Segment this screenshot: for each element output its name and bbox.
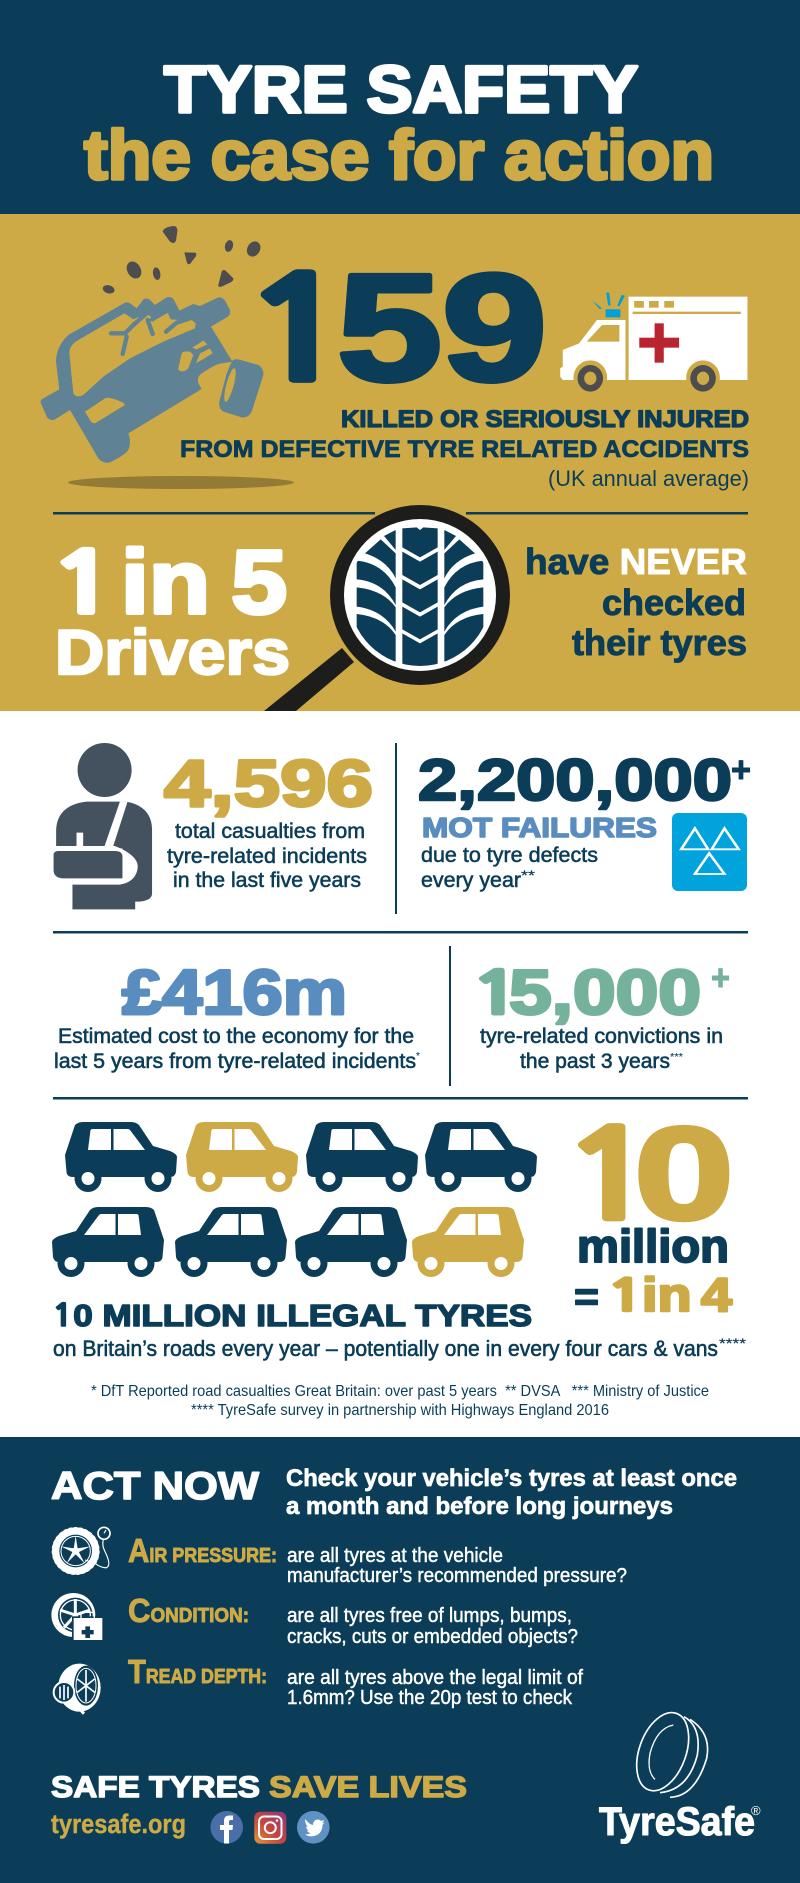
- big number 159: [239, 243, 547, 413]
- icon: MOT triangles: [672, 813, 747, 891]
- statistic: 4,596 casualties: in the last five years: [173, 869, 361, 892]
- icon: facebook: [210, 1811, 243, 1844]
- statistic: 15,000 convictions: +: [711, 957, 730, 998]
- logo wordmark: TyreSafe: [599, 1800, 755, 1844]
- statement: killed or seriously injured: [180, 406, 749, 491]
- statistic: 15,000 convictions: [470, 957, 730, 1073]
- big number 159: 1: [239, 261, 357, 402]
- text: air pressure question: are all tyres at the vehicle: [287, 1545, 503, 1567]
- icon: person with arm sling: [54, 743, 152, 909]
- icon: air pressure tyre and gauge: [53, 1527, 110, 1574]
- statistic: £416m cost: Estimated cost to the economy for the: [58, 1025, 414, 1048]
- statistic: £416m cost: last 5 years from tyre-related incidents: [54, 1050, 416, 1073]
- slogan: safe tyres save lives: [51, 1771, 467, 1804]
- icon: debris: [102, 226, 263, 295]
- statistic: 15,000 convictions: 1: [470, 964, 522, 1023]
- statistic: 1 in 5 drivers: [48, 533, 290, 688]
- statistic: 10 million = 1 in 4: 1: [606, 1274, 645, 1318]
- icon: ambulance: [560, 293, 747, 395]
- text: condition question: cracks, cuts or embedded objects?: [287, 1626, 578, 1648]
- heading: 10 million illegal tyres: 10 MILLION ILLEGAL TYRES: [52, 1298, 532, 1333]
- statistic: 4,596 casualties: 4,596: [164, 746, 373, 820]
- text: condition question: are all tyres free of lumps, bumps,: [287, 1605, 572, 1627]
- statistic: £416m cost: [54, 958, 420, 1073]
- panel: white statistics: [0, 711, 800, 1437]
- statistic: 10 million = 1 in 4: million: [577, 1220, 729, 1272]
- statistic: 2,200,000 MOT failures: 2,200,000: [418, 748, 732, 813]
- footnotes: **** TyreSafe survey in partnership with Highways England 2016: [191, 1402, 609, 1419]
- panel: gold statistics: [0, 214, 800, 711]
- statistic: 4,596 casualties: [164, 746, 373, 892]
- text: on Britain's roads: ****: [719, 1335, 747, 1351]
- text: check your tyres: a month and before long journeys: [286, 1493, 673, 1520]
- slogan: safe tyres save lives: SAFE TYRES: [51, 1771, 260, 1804]
- statement: have never checked: their tyres: [572, 622, 747, 663]
- statistic: 1 in 5 drivers: 1: [48, 542, 119, 626]
- icon: row of eight cars: [52, 1122, 537, 1277]
- statement: have never checked: [525, 541, 747, 663]
- text: tread depth question: [287, 1667, 583, 1709]
- statement: killed or seriously injured: (UK annual average): [548, 466, 749, 491]
- text: tread depth question: 1.6mm? Use the 20p test to check: [287, 1687, 573, 1709]
- statistic: 10 million = 1 in 4: in 4: [642, 1268, 732, 1321]
- panel: act now: [0, 1437, 800, 1883]
- logo: TyreSafe: ®: [751, 1803, 761, 1818]
- label: tread depth: TREAD DEPTH:: [128, 1653, 267, 1690]
- title: TYRE SAFETY: [164, 52, 638, 126]
- label: condition: CONDITION:: [128, 1592, 249, 1629]
- icon: magnifier over tyre tread: [264, 505, 510, 711]
- statistic: 2,200,000 MOT failures: due to tyre defects: [421, 844, 598, 867]
- statistic: 4,596 casualties: tyre-related incidents: [167, 845, 367, 868]
- text: tread depth question: are all tyres above the legal limit of: [287, 1667, 583, 1689]
- statement: killed or seriously injured: KILLED OR SERIOUSLY INJURED: [341, 406, 749, 433]
- big number 159: 59: [337, 243, 547, 413]
- panel: header: [0, 0, 800, 214]
- statistic: £416m cost: £416m: [122, 958, 347, 1028]
- slogan: safe tyres save lives: SAVE LIVES: [269, 1771, 467, 1804]
- statement: have never checked: checked: [602, 582, 746, 623]
- text: condition question: [287, 1605, 578, 1648]
- footnotes: * DfT Reported road casualties Great Britain: over past 5 years ** DVSA *** Ministry of Justice: [91, 1383, 709, 1400]
- icon: tread depth tyre and magnifier: [54, 1664, 101, 1714]
- statistic: 1 in 5 drivers: Drivers: [55, 618, 290, 688]
- statistic: 2,200,000 MOT failures: [418, 748, 751, 892]
- statement: killed or seriously injured: FROM DEFECTIVE TYRE RELATED ACCIDENTS: [180, 436, 749, 463]
- heading: act now: ACT NOW: [51, 1465, 259, 1508]
- footnotes: [91, 1383, 709, 1419]
- statistic: 10 million = 1 in 4: 1: [559, 1116, 661, 1238]
- icon: condition wheel and first aid box: [51, 1593, 104, 1641]
- subtitle: the case for action: [84, 116, 714, 194]
- statistic: 10 million = 1 in 4: =: [574, 1275, 599, 1319]
- statistic: 10 million = 1 in 4: [559, 1100, 734, 1321]
- icon: crashed car: [41, 226, 263, 463]
- text: check your tyres: Check your vehicle’s tyres at least once: [286, 1465, 737, 1492]
- text: air pressure question: [287, 1545, 627, 1587]
- statement: have never checked: have NEVER: [525, 541, 747, 582]
- statistic: 15,000 convictions: ***: [670, 1052, 683, 1063]
- statistic: 15,000 convictions: 5,000: [509, 958, 701, 1028]
- label: air pressure: AIR PRESSURE:: [128, 1532, 277, 1569]
- statistic: 1 in 5 drivers: in 5: [121, 533, 287, 633]
- statistic: £416m cost: *: [416, 1051, 420, 1062]
- text: check your tyres: [286, 1465, 737, 1520]
- text: on Britain's roads: on Britain’s roads every year – potentially one in every four cars & vans: [53, 1336, 718, 1361]
- icon: car shadow: [68, 476, 294, 489]
- statistic: 10 million = 1 in 4: 0: [634, 1100, 734, 1247]
- logo: TyreSafe: [599, 1705, 761, 1844]
- statistic: 2,200,000 MOT failures: +: [731, 749, 751, 790]
- statistic: 15,000 convictions: tyre-related convictions in: [480, 1025, 723, 1048]
- statistic: 15,000 convictions: the past 3 years: [520, 1050, 670, 1073]
- icon: instagram: [254, 1812, 286, 1844]
- statistic: 2,200,000 MOT failures: **: [521, 867, 536, 883]
- link: tyresafe.org: tyresafe.org: [51, 1809, 186, 1839]
- icon: twitter: [297, 1811, 330, 1844]
- statistic: 4,596 casualties: total casualties from: [175, 820, 365, 843]
- icon: logo tyre: [627, 1705, 708, 1798]
- text: air pressure question: manufacturer’s recommended pressure?: [287, 1565, 627, 1587]
- statistic: 2,200,000 MOT failures: MOT FAILURES: [422, 812, 657, 843]
- statistic: 2,200,000 MOT failures: every year: [421, 869, 521, 892]
